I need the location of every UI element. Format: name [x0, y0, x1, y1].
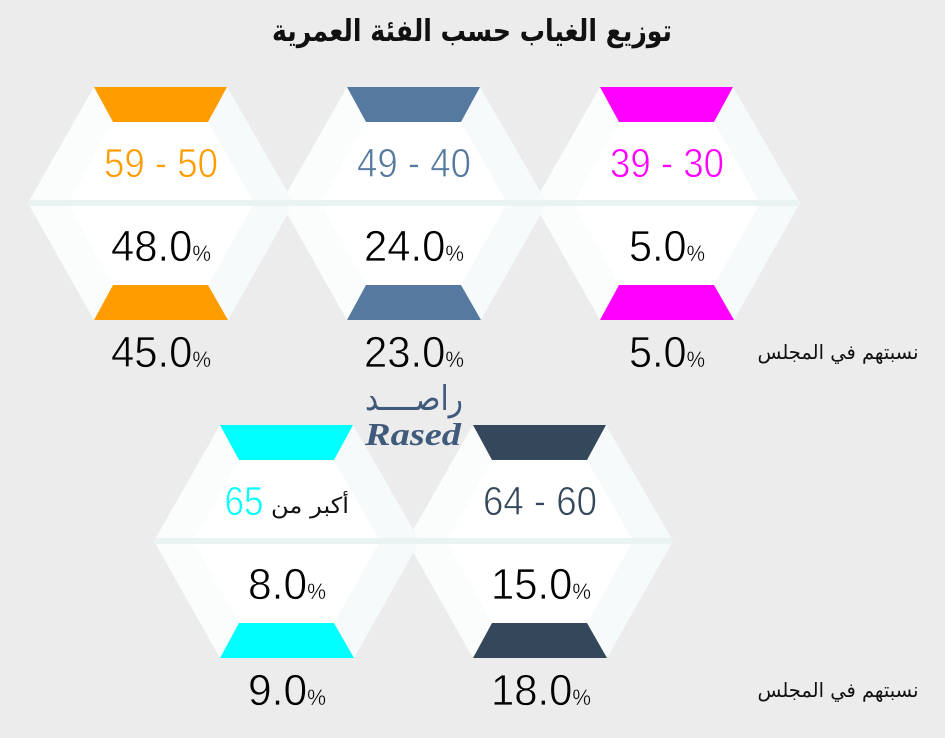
- panel: age over 65: 9.0%: [248, 666, 326, 715]
- panel: age 50-59: [28, 87, 294, 377]
- panel: age 50-59: 59 - 50: [104, 140, 218, 186]
- panel: age 40-49: 23.0%: [364, 328, 464, 377]
- panel: age 60-64: [407, 425, 673, 715]
- panel: age over 65: [154, 425, 420, 715]
- panel: age 30-39: [534, 87, 800, 377]
- panel: age 30-39: 5.0%: [629, 222, 705, 271]
- panel: age over 65: 8.0%: [248, 560, 326, 609]
- panel: age over 65: 65: [224, 478, 264, 524]
- logo: Rased: Rased: [364, 416, 462, 452]
- panel: age 60-64: 64 - 60: [483, 478, 597, 524]
- panel: age 40-49: [281, 87, 547, 377]
- panel: age 60-64: 18.0%: [491, 666, 591, 715]
- panel: age 40-49: 49 - 40: [357, 140, 471, 186]
- panel: age 30-39: 39 - 30: [610, 140, 724, 186]
- logo: Rased: [364, 379, 463, 452]
- panel: age 40-49: 24.0%: [364, 222, 464, 271]
- logo: Rased: راصــــد: [365, 379, 463, 419]
- title: توزيع الغياب حسب الفئة العمرية: [272, 14, 672, 49]
- label: share in council, row 2: نسبتهم في المجلس: [758, 678, 918, 703]
- panel: age over 65: أكبر من: [271, 491, 349, 519]
- panel: age 50-59: 45.0%: [111, 328, 211, 377]
- panel: age 50-59: 48.0%: [111, 222, 211, 271]
- panel: age 60-64: 15.0%: [491, 560, 591, 609]
- panel: age 30-39: 5.0%: [629, 328, 705, 377]
- label: share in council, row 1: نسبتهم في المجلس: [758, 340, 918, 365]
